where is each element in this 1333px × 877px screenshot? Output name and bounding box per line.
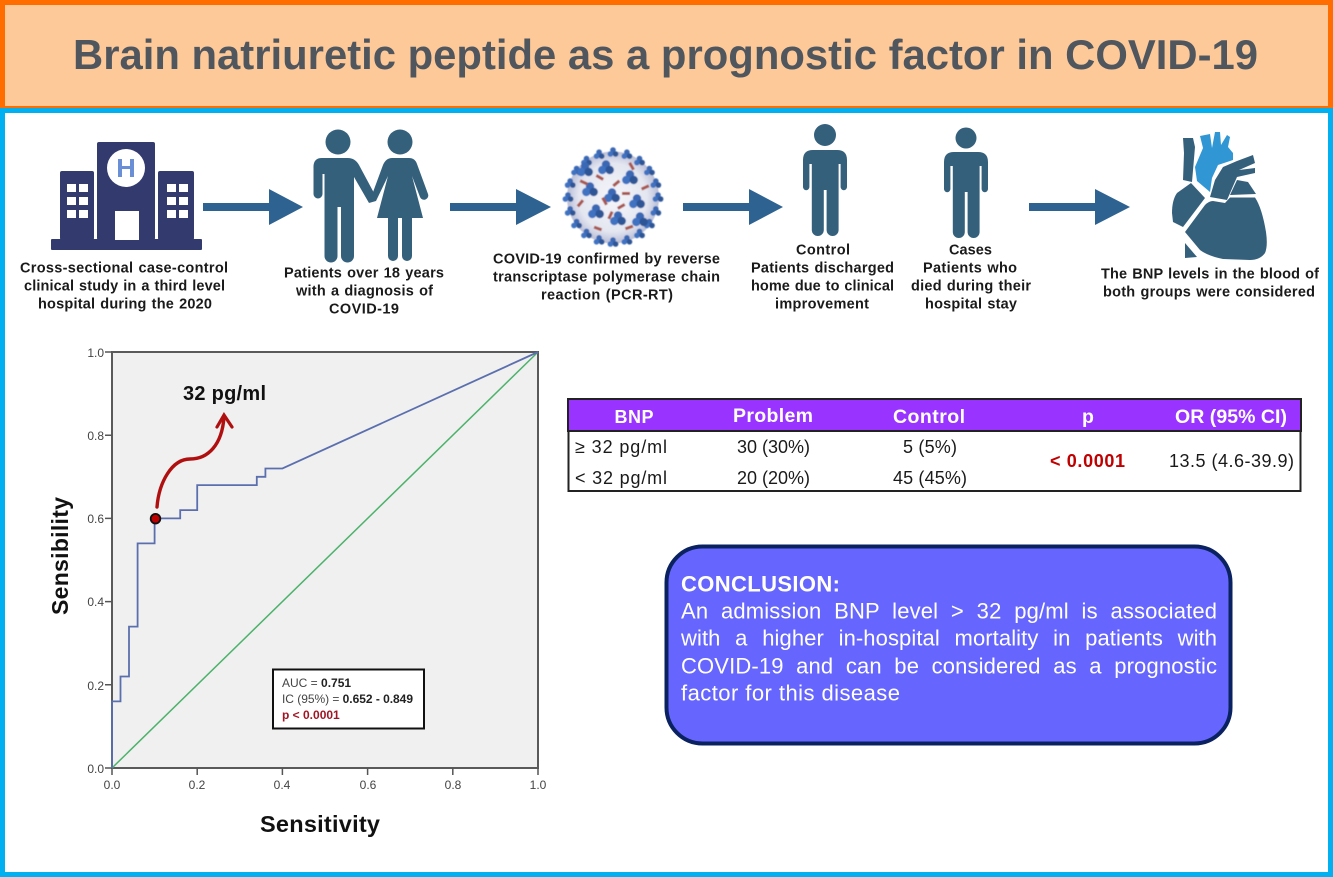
plot area [112, 352, 538, 768]
conclusion box: CONCLUSION: [681, 572, 840, 596]
arrow 4 [1029, 189, 1130, 225]
ROC curve [112, 352, 538, 768]
title: Brain natriuretic peptide as a prognostic factor in COVID-19 [73, 31, 1258, 78]
table body: < 32 pg/ml [575, 468, 667, 488]
y axis ticks and labels: 1.0 [87, 346, 104, 360]
conclusion box: with a higher in-hospital mortality in patients with [680, 626, 1217, 650]
text: patients: with a diagnosis of [295, 284, 433, 300]
x axis ticks and labels: 1.0 [530, 778, 547, 792]
text: BNP levels: both groups were considered [1103, 284, 1315, 300]
AUC statistics box [273, 670, 424, 728]
AUC statistics box: p < 0.0001 [282, 708, 340, 722]
text: PCR confirmation: reaction (PCR-RT) [541, 288, 673, 304]
icon: couple [313, 130, 428, 262]
x axis ticks and labels: 0.2 [189, 778, 206, 792]
text: cases group: hospital stay [925, 296, 1017, 312]
table body: 5 (5%) [903, 437, 957, 457]
x axis title: Sensitivity [260, 811, 380, 837]
y axis ticks and labels: 0.2 [87, 679, 104, 693]
text: control group: improvement [775, 296, 869, 312]
text: study design: clinical study in a third level [24, 278, 225, 294]
text: cases group: Cases [949, 242, 992, 258]
text: study design: Cross-sectional case-control [20, 260, 228, 276]
table body: 45 (45%) [893, 468, 967, 488]
text: PCR confirmation: transcriptase polymerase chain [493, 270, 720, 286]
red curved arrow [157, 415, 232, 507]
arrow 1 [203, 189, 303, 225]
text: PCR confirmation [493, 252, 720, 304]
icon: coronavirus [563, 147, 663, 247]
text: study design [20, 260, 228, 312]
ROC chart [47, 346, 547, 837]
x axis ticks and labels: 0.4 [274, 778, 291, 792]
reference diagonal [112, 352, 538, 768]
table body: 13.5 (4.6-39.9) [1169, 451, 1294, 471]
x axis ticks and labels: 0.6 [360, 778, 377, 792]
text: study design: hospital during the 2020 [38, 296, 212, 312]
table body: ≥ 32 pg/ml [575, 437, 667, 457]
text: control group: home due to clinical [751, 278, 894, 294]
text: BNP levels: The BNP levels in the blood of [1101, 266, 1319, 282]
cut-off label: 32 pg/ml [183, 383, 266, 405]
text: patients: COVID-19 [329, 302, 399, 318]
y axis ticks and labels: 0.4 [87, 595, 104, 609]
table header: p [1082, 406, 1094, 428]
text: cases group [911, 242, 1031, 312]
conclusion box: An admission BNP level > 32 pg/ml is associated [681, 598, 1217, 624]
arrow 2 [450, 189, 551, 225]
arrow 3 [683, 189, 783, 225]
icon: heart [1172, 132, 1267, 260]
text: cases group: Patients who [923, 260, 1017, 276]
text: cases group: died during their [911, 278, 1031, 294]
table header: Control [893, 406, 965, 428]
text: PCR confirmation: COVID-19 confirmed by reverse [493, 252, 720, 268]
conclusion box: factor for this disease [681, 680, 900, 706]
text: patients [284, 266, 444, 318]
icon: control person [803, 124, 847, 236]
text: BNP levels [1101, 266, 1319, 300]
cut-off point [151, 514, 160, 524]
y axis ticks and labels: 0.0 [87, 762, 104, 776]
x axis ticks and labels: 0.8 [445, 778, 462, 792]
table header: BNP [614, 407, 654, 427]
table header: OR (95% CI) [1175, 406, 1287, 428]
AUC statistics box: IC (95%) = 0.652 - 0.849 [282, 692, 413, 706]
text: control group: Control [796, 242, 850, 258]
table body [568, 431, 1300, 491]
y axis ticks and labels: 0.8 [87, 429, 104, 443]
conclusion box [666, 546, 1230, 744]
table header: Problem [733, 405, 813, 427]
results table [568, 399, 1301, 491]
table header [568, 399, 1301, 431]
AUC statistics box: AUC = 0.751 [282, 676, 351, 690]
text: control group [751, 242, 894, 312]
title banner [2, 2, 1330, 108]
y axis ticks and labels [87, 346, 112, 776]
y axis ticks and labels: 0.6 [87, 512, 104, 526]
table body: 30 (30%) [737, 437, 810, 457]
x axis ticks and labels: 0.0 [104, 778, 121, 792]
icon: hospital [51, 142, 202, 250]
x axis ticks and labels [104, 768, 547, 792]
table body: 20 (20%) [737, 468, 810, 488]
text: control group: Patients discharged [751, 260, 894, 276]
icon: case person [944, 128, 988, 238]
table body: < 0.0001 [1050, 451, 1125, 471]
text: patients: Patients over 18 years [284, 266, 444, 282]
y axis title: Sensibility [47, 497, 73, 615]
conclusion box: COVID-19 and can be considered as a prognostic [681, 654, 1217, 678]
